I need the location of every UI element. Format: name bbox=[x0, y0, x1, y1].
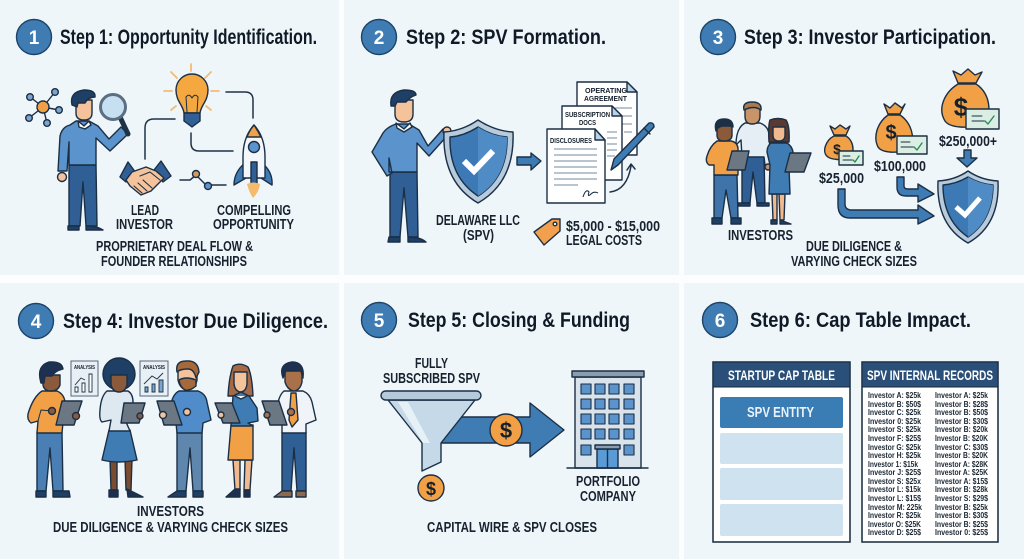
icon: pen bbox=[611, 123, 654, 170]
label: portfolio company: COMPANY bbox=[580, 489, 636, 505]
panel: step 5 closing and funding bbox=[344, 283, 679, 559]
document: disclosures: DISCLOSURES bbox=[550, 136, 592, 145]
table: spv internal records: Investor B: $50$ bbox=[868, 399, 921, 409]
heading: step 2: Step 2: SPV Formation. bbox=[406, 26, 606, 49]
arrow: down to shield bbox=[957, 150, 977, 167]
person: orange sweater bbox=[28, 362, 82, 497]
table: startup cap table bbox=[713, 362, 850, 542]
icon: dollar coin large: $ bbox=[500, 418, 512, 443]
table: spv internal records: Investor B: $28k bbox=[935, 484, 988, 494]
arrow: 25000 to shield bbox=[838, 189, 934, 224]
panel: step 4 investor due diligence bbox=[0, 283, 339, 559]
table: spv internal records: Investor B: $30$ bbox=[935, 510, 988, 520]
caption: proprietary deal flow: FOUNDER RELATIONSHIPS bbox=[101, 254, 247, 270]
person: bearded man bbox=[157, 361, 211, 497]
step number badge 5 bbox=[362, 302, 396, 338]
table: spv internal records: Investor B: $25$ bbox=[935, 519, 988, 529]
table: spv internal records: Investor A: $25K bbox=[935, 467, 989, 477]
table: spv internal records: Investor A: $28K bbox=[935, 459, 989, 469]
person: woman orange skirt bbox=[215, 364, 258, 497]
label: investors: INVESTORS bbox=[728, 228, 793, 244]
panel: step 2 SPV formation bbox=[344, 0, 679, 275]
panel: step 1 opportunity identification bbox=[0, 0, 339, 275]
heading: step 4: Step 4: Investor Due Diligence. bbox=[63, 310, 328, 333]
icon: shield with check bbox=[938, 171, 998, 243]
document: subscription docs: DOCS bbox=[579, 118, 596, 127]
step number badge 2: 2 bbox=[374, 28, 384, 49]
table: spv internal records: Investor A: $25k bbox=[935, 390, 988, 400]
label: 250000: $250,000+ bbox=[939, 134, 997, 150]
document: disclosures bbox=[547, 129, 605, 203]
arrow: shield to documents bbox=[517, 153, 541, 170]
table: spv internal records: Investor B: $20k bbox=[935, 424, 988, 434]
icon: rocket bbox=[234, 125, 272, 198]
table: spv internal records: Investor B: $20K bbox=[935, 433, 989, 443]
label: lead investor: LEAD bbox=[131, 203, 159, 219]
chart card: analysis 1 bbox=[71, 361, 98, 396]
person: man with tie bbox=[262, 362, 316, 497]
table: spv internal records: Investor S: $29$ bbox=[935, 493, 988, 503]
table: spv internal records: Investor F: $25$ bbox=[868, 433, 921, 443]
table: spv internal records: Investor J: $25$ bbox=[868, 467, 921, 477]
label: fully subscribed spv: FULLY bbox=[415, 356, 448, 372]
icon: shield with check bbox=[444, 120, 513, 203]
icon: dollar coin large bbox=[490, 414, 522, 446]
label: legal costs: LEGAL COSTS bbox=[566, 233, 642, 249]
heading: step 6: Step 6: Cap Table Impact. bbox=[750, 309, 971, 332]
caption: investors due diligence: DUE DILIGENCE & VARYING CHECK SIZES bbox=[53, 520, 288, 536]
person: afro woman bbox=[100, 358, 145, 497]
row: spv entity: SPV ENTITY bbox=[747, 404, 814, 421]
label: legal costs: $5,000 - $15,000 bbox=[566, 219, 660, 235]
document: operating agreement: AGREEMENT bbox=[584, 94, 627, 103]
icon: money bag 250000: $ bbox=[954, 92, 969, 122]
document: operating agreement: OPERATING bbox=[585, 86, 627, 95]
icon: money bag 100000 bbox=[876, 103, 927, 154]
caption: investors due diligence: INVESTORS bbox=[137, 504, 204, 520]
caption: capital wire: CAPITAL WIRE & SPV CLOSES bbox=[427, 520, 597, 536]
table: spv internal records: Investor S: $25x bbox=[868, 476, 921, 486]
table: spv internal records: Investor O: $25K bbox=[868, 519, 922, 529]
table: spv internal records: Investor M: 225k bbox=[868, 502, 922, 512]
table: spv internal records: Investor B: $50$ bbox=[935, 407, 988, 417]
table: spv internal records: Investor B: $25k bbox=[935, 502, 988, 512]
table: spv internal records: Investor 1: $15k bbox=[868, 459, 918, 469]
label: portfolio company bbox=[576, 474, 640, 505]
label: 25000: $25,000 bbox=[819, 171, 864, 187]
step number badge 4: 4 bbox=[31, 312, 42, 333]
connector lines bbox=[145, 92, 253, 185]
heading: step 5: Step 5: Closing & Funding bbox=[408, 309, 630, 332]
table: spv internal records: Investor 0: $25k bbox=[868, 416, 921, 426]
step number badge 6 bbox=[702, 302, 738, 338]
step number badge 1: 1 bbox=[29, 28, 40, 49]
label: fully subscribed spv: SUBSCRIBED SPV bbox=[383, 371, 480, 387]
caption: due diligence: DUE DILIGENCE & bbox=[806, 239, 902, 255]
table: spv internal records: Investor A: $25k bbox=[868, 390, 921, 400]
step number badge 2 bbox=[362, 20, 396, 54]
table: spv internal records: Investor L: $15$ bbox=[868, 493, 921, 503]
table: spv internal records: Investor G: $25k bbox=[868, 442, 921, 452]
icon: network nodes bbox=[26, 89, 62, 126]
step number badge 5: 5 bbox=[374, 311, 385, 332]
icon: money bag 250000 bbox=[942, 69, 999, 129]
icon: funnel bbox=[381, 391, 481, 471]
step number badge 4 bbox=[18, 304, 54, 338]
label: compelling opportunity bbox=[213, 203, 294, 233]
table: spv internal records: Investor B: $28$ bbox=[935, 399, 988, 409]
arrow: capital flow bbox=[440, 403, 564, 457]
caption: investors due diligence bbox=[53, 504, 288, 536]
row: spv entity bbox=[720, 397, 843, 428]
label: compelling opportunity: OPPORTUNITY bbox=[213, 217, 294, 233]
icon: dollar coin small bbox=[418, 475, 444, 501]
chart card: analysis 2 bbox=[140, 361, 168, 396]
icon: price tag bbox=[534, 219, 560, 245]
icon: dollar coin small: $ bbox=[426, 479, 436, 499]
label: delaware llc: DELAWARE LLC bbox=[436, 213, 520, 229]
icon: money bag 25000 bbox=[825, 125, 863, 165]
chart card: analysis 2: ANALYSIS bbox=[143, 365, 166, 371]
step number badge 3: 3 bbox=[713, 28, 723, 49]
table: spv internal records: Investor C: $30$ bbox=[935, 442, 988, 452]
table: spv internal records: Investor C: $25k bbox=[868, 407, 921, 417]
icon: money bag 100000: $ bbox=[885, 122, 897, 144]
icon: money bag 25000: $ bbox=[833, 141, 841, 157]
step number badge 6: 6 bbox=[715, 311, 725, 332]
panel: step 3 investor participation bbox=[684, 0, 1024, 275]
label: fully subscribed spv bbox=[383, 356, 480, 387]
label: delaware llc bbox=[436, 213, 520, 244]
label: lead investor: INVESTOR bbox=[116, 217, 173, 233]
label: lead investor bbox=[116, 203, 173, 233]
step number badge 1 bbox=[16, 20, 52, 54]
table: spv internal records: Investor A: $15$ bbox=[935, 476, 988, 486]
caption: due diligence bbox=[791, 239, 917, 270]
heading: step 1: Step 1: Opportunity Identification. bbox=[60, 26, 317, 49]
icon: three investors bbox=[706, 102, 811, 224]
arrow: curved bbox=[610, 164, 635, 192]
document: subscription docs: SUBSCRIPTION bbox=[565, 110, 610, 119]
icon: portfolio company building bbox=[567, 371, 648, 468]
label: 100000: $100,000 bbox=[874, 159, 926, 175]
chart card: analysis 1: ANALYSIS bbox=[74, 365, 96, 371]
document: subscription docs bbox=[562, 106, 622, 180]
label: delaware llc: (SPV) bbox=[463, 228, 494, 244]
label: legal costs bbox=[566, 219, 660, 249]
caption: proprietary deal flow: PROPRIETARY DEAL FLOW & bbox=[96, 239, 253, 255]
step number badge 3 bbox=[700, 20, 736, 54]
icon: person with hand on shield bbox=[372, 90, 451, 242]
icon: light bulb bbox=[164, 64, 219, 127]
label: compelling opportunity: COMPELLING bbox=[217, 203, 291, 219]
icon: handshake bbox=[120, 161, 171, 195]
table: spv internal records: Investor B: $20K bbox=[935, 450, 989, 460]
table: spv internal records: Investor D: $25$ bbox=[868, 527, 921, 537]
table: spv internal records: Investor B: $30$ bbox=[935, 416, 988, 426]
label: portfolio company: PORTFOLIO bbox=[576, 474, 640, 490]
table: spv internal records: Investor R: $25k bbox=[868, 510, 921, 520]
table: spv internal records: Investor L: $15k bbox=[868, 484, 921, 494]
table: startup cap table: STARTUP CAP TABLE bbox=[728, 367, 835, 383]
table: spv internal records: Investor S: $25k bbox=[868, 424, 921, 434]
caption: proprietary deal flow bbox=[96, 239, 253, 270]
table: spv internal records: Investor H: $25k bbox=[868, 450, 921, 460]
icon: squiggle nodes bbox=[192, 170, 212, 190]
table: spv internal records bbox=[862, 362, 998, 542]
document: operating agreement bbox=[577, 82, 637, 155]
panel: step 6 cap table impact bbox=[684, 283, 1024, 559]
arrow: 100000 to shield bbox=[897, 177, 934, 202]
caption: due diligence: VARYING CHECK SIZES bbox=[791, 254, 917, 270]
table: spv internal records: Investor 0: $25$ bbox=[935, 527, 988, 537]
icon: lead investor with magnifier bbox=[58, 90, 128, 230]
